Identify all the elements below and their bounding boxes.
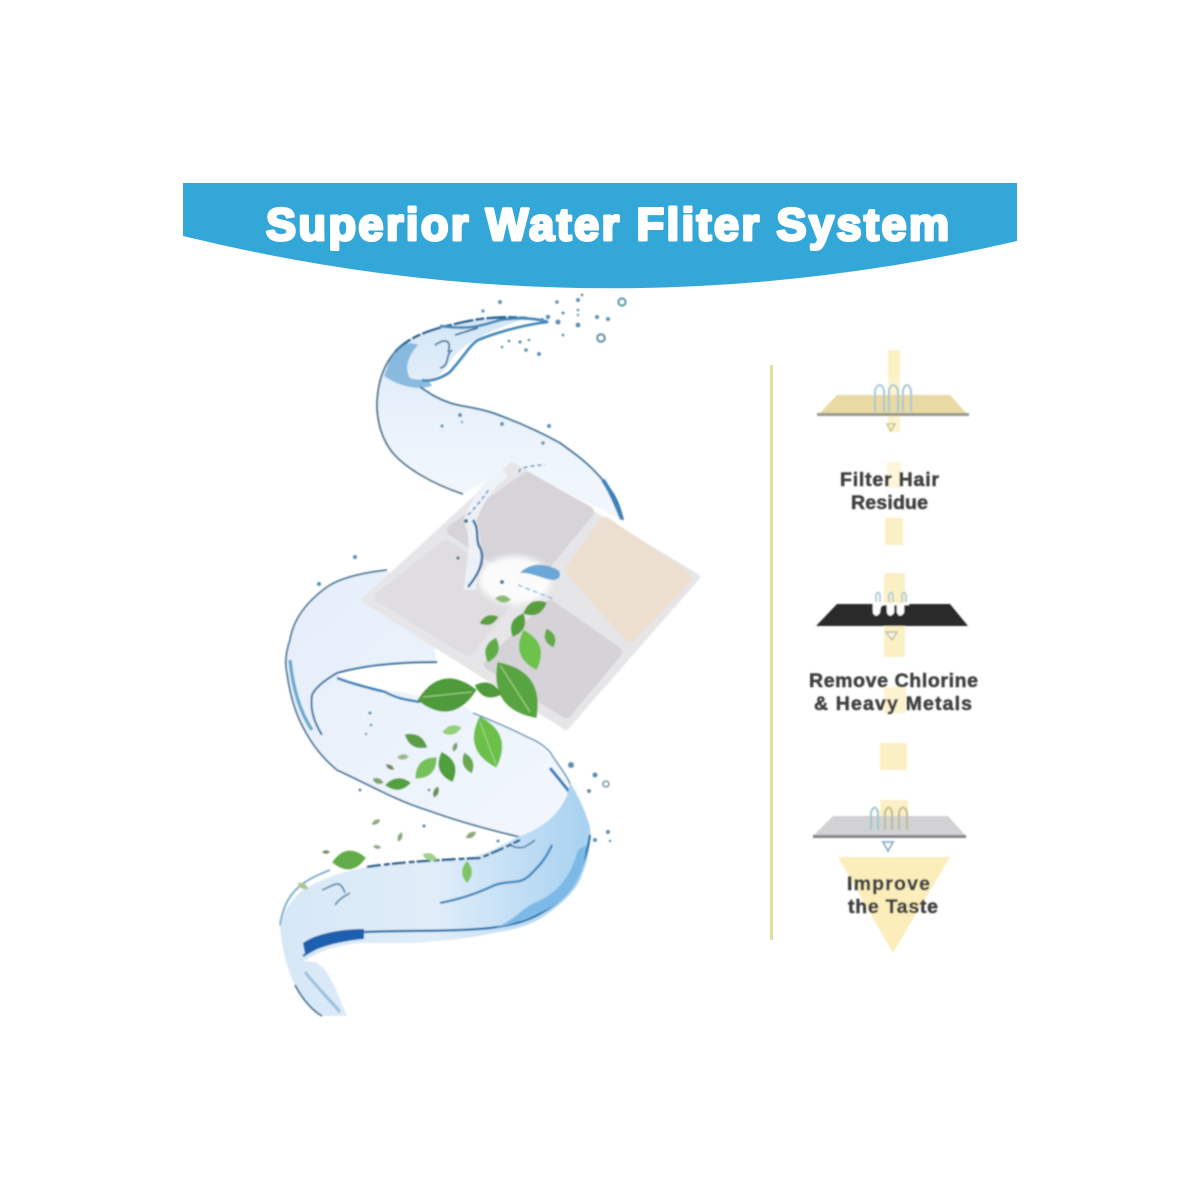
filter tile: cream [571,523,686,636]
lower-left water loop [286,570,577,837]
water splash illustration [280,294,697,1016]
water filter pad [365,465,697,727]
filter tile: left [381,546,515,650]
flow bar segments [880,350,908,836]
label: filter hair residue: Residue [851,492,928,514]
label: remove chlorine and heavy metals: Remove Chlorine [809,670,978,692]
label: filter hair residue: Filter Hair [840,469,939,491]
layer 3: taste plate [813,808,966,851]
water droplets [317,294,626,843]
flow arrowhead [838,857,950,953]
layer 2: carbon plate [816,592,968,640]
splash over filter [456,465,560,604]
label: filter hair residue [840,469,939,514]
label: improve the taste [847,873,938,918]
layer 1: hair filter plate [817,385,969,431]
green leaves [296,595,558,891]
filtration column [809,350,978,953]
label: improve the taste: Improve [847,873,930,895]
label: remove chlorine and heavy metals: & Heavy Metals [814,693,972,715]
upper water swirl [377,317,623,520]
filter tile: bottom [490,606,616,712]
lower water sweep [280,783,591,1016]
divider line [770,365,773,940]
label: improve the taste: the Taste [848,896,938,918]
label: remove chlorine and heavy metals [809,670,978,715]
header banner [183,183,1017,288]
filter tile: top [453,478,588,582]
title: Superior Water Fliter System [266,199,949,250]
